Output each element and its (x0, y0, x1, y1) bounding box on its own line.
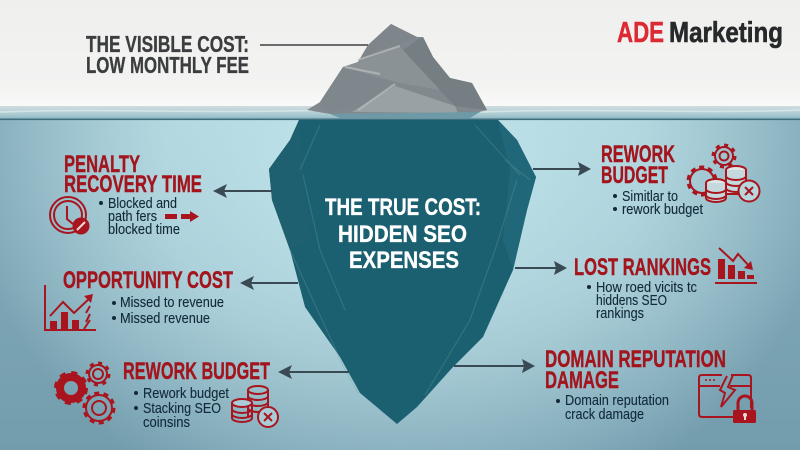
heading: penalty recovery: RECOVERY TIME (64, 171, 202, 198)
logo: ADE (617, 17, 664, 49)
icon: red arrow (165, 211, 199, 222)
center heading: THE TRUE COST: (325, 194, 481, 221)
heading: penalty recovery (64, 151, 202, 198)
text: penalty bullets (99, 195, 180, 238)
underwater background (0, 118, 800, 450)
text: rework bullets (134, 385, 230, 431)
panel: lost rankings (574, 248, 757, 322)
text: rework bullets: rework budget (622, 201, 704, 218)
icon: clock with badge (50, 197, 90, 234)
text: rework bullets (613, 188, 704, 218)
text: rework bullets: Simitlar to (622, 188, 678, 205)
text: rankings bullets (587, 279, 697, 322)
heading: domain reputation (545, 346, 726, 394)
text: domain bullets (556, 392, 669, 423)
logo (617, 17, 783, 49)
text: rankings bullets: hiddens SEO (596, 292, 667, 309)
text: opportunity bullets: Missed to revenue (120, 294, 224, 311)
water surface band (0, 106, 800, 120)
heading: domain reputation: DAMAGE (545, 367, 619, 394)
center heading (325, 194, 481, 274)
icon: gears (56, 363, 114, 423)
text: penalty bullets: path fers (108, 208, 157, 225)
text: domain bullets: crack damage (565, 406, 644, 423)
arrow: to rework budget left (278, 365, 349, 379)
heading: lost rankings: LOST RANKINGS (574, 254, 711, 281)
arrow: to rework budget right (533, 162, 591, 176)
panel: domain reputation damage (545, 346, 756, 423)
heading: rework budget: BUDGET (601, 162, 668, 189)
text: rework bullets: coinsins (143, 414, 190, 431)
iceberg above water (307, 24, 487, 118)
panel: opportunity cost (45, 267, 233, 330)
text: rankings bullets: rankings (596, 305, 644, 322)
icon: gears and coins (688, 145, 760, 202)
callout: visible cost: THE VISIBLE COST: (86, 31, 249, 57)
callout: visible cost: LOW MONTHLY FEE (86, 52, 249, 78)
center heading: HIDDEN SEO (338, 221, 467, 248)
heading: penalty recovery: PENALTY (64, 151, 140, 178)
center heading: EXPENSES (349, 247, 459, 274)
icon: growth chart (45, 285, 96, 330)
text: domain bullets: Domain reputation (565, 392, 669, 409)
text: opportunity bullets: Missed revenue (120, 310, 210, 327)
text: penalty bullets: blocked time (108, 221, 180, 238)
sky background (0, 0, 800, 108)
heading: domain reputation: DOMAIN REPUTATION (545, 346, 726, 373)
arrow: to domain reputation (454, 359, 535, 373)
heading: rework budget (601, 141, 675, 189)
panel: penalty recovery time (50, 151, 202, 238)
icon: falling bars (715, 248, 757, 284)
callout: visible cost (86, 31, 368, 78)
panel: rework budget right (601, 141, 760, 218)
text: rework bullets: Stacking SEO (143, 400, 221, 417)
heading: opportunity cost: OPPORTUNITY COST (63, 267, 233, 294)
arrow: to opportunity cost (240, 276, 298, 290)
icon: coin stacks with x (232, 386, 278, 427)
panel: rework budget left (56, 358, 278, 431)
arrow: to penalty recovery (213, 184, 272, 198)
text: penalty bullets: Blocked and (108, 195, 177, 212)
arrow: to lost rankings (515, 261, 567, 275)
icon: broken browser and lock (699, 375, 756, 423)
submerged iceberg (269, 120, 536, 424)
heading: rework budget: REWORK BUDGET (123, 358, 270, 385)
heading: rework budget: REWORK (601, 141, 675, 168)
text: opportunity bullets (112, 294, 224, 327)
text: rework bullets: Rework budget (143, 385, 230, 402)
text: rankings bullets: How roed vicits tc (596, 279, 697, 296)
